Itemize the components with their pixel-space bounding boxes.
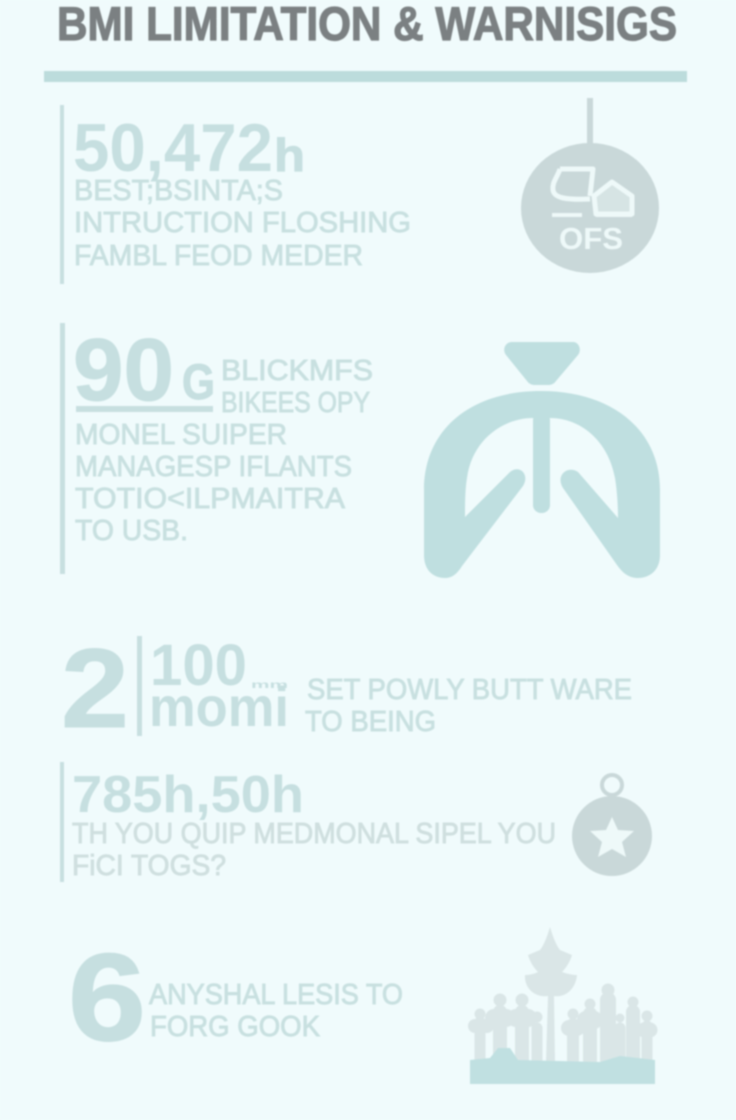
side label: BIKEES OPY [221,387,370,419]
description: MONEL SUIPER [75,419,287,451]
description: TOTIO<ILPMAITRA [75,483,346,515]
description: ANYSHAL LESIS TO [149,979,403,1011]
side label [221,355,373,419]
panel: stat 785h,50h [60,762,652,882]
icon: hanging badge OFS: OFS [559,221,623,256]
big number: 90 [73,320,174,419]
description: FORG GOOK [150,1011,321,1043]
description [149,979,403,1043]
stacked figure [149,633,289,738]
description: MANAGESP IFLANTS [75,451,352,483]
description [72,818,556,882]
icon: tree and people [470,927,655,1084]
big number: 50,472 [73,110,273,186]
panel: stat 2 / 100 momi [61,626,632,751]
description: TO BEING [305,706,436,738]
accent bar [60,323,65,574]
description: FAMBL FEOD MEDER [74,240,363,272]
side label: BLICKMFS [221,355,373,387]
description: TH YOU QUIP MEDMONAL SIPEL YOU [72,818,556,850]
description [74,175,411,272]
description: SET POWLY BUTT WARE [307,674,632,706]
divider bar [137,636,142,736]
big number: 785h,50h [72,766,304,824]
description: TO USB. [75,515,188,547]
description [305,674,632,738]
description: INTRUCTION FLOSHING [74,207,411,239]
unit: h [274,129,305,181]
icon: hanging badge OFS [521,98,659,273]
panel: stat 50,472h [60,98,659,284]
icon: lungs [424,342,660,578]
accent bar [60,762,64,882]
panel: stat 90 G [60,320,660,578]
big number: 2 [61,626,129,751]
description: BEST;BSINTA;S [74,175,283,207]
icon: star ornament [572,775,652,876]
description: FiCI TOGS? [72,850,226,882]
description [75,419,352,547]
big number: 6 [68,929,146,1067]
stacked figure: mm [251,680,288,691]
stacked figure: momi [149,675,289,738]
accent bar [60,105,64,284]
panel: stat 6 [68,927,655,1084]
unit: G [182,354,215,410]
stacked figure: 100 [150,633,247,698]
